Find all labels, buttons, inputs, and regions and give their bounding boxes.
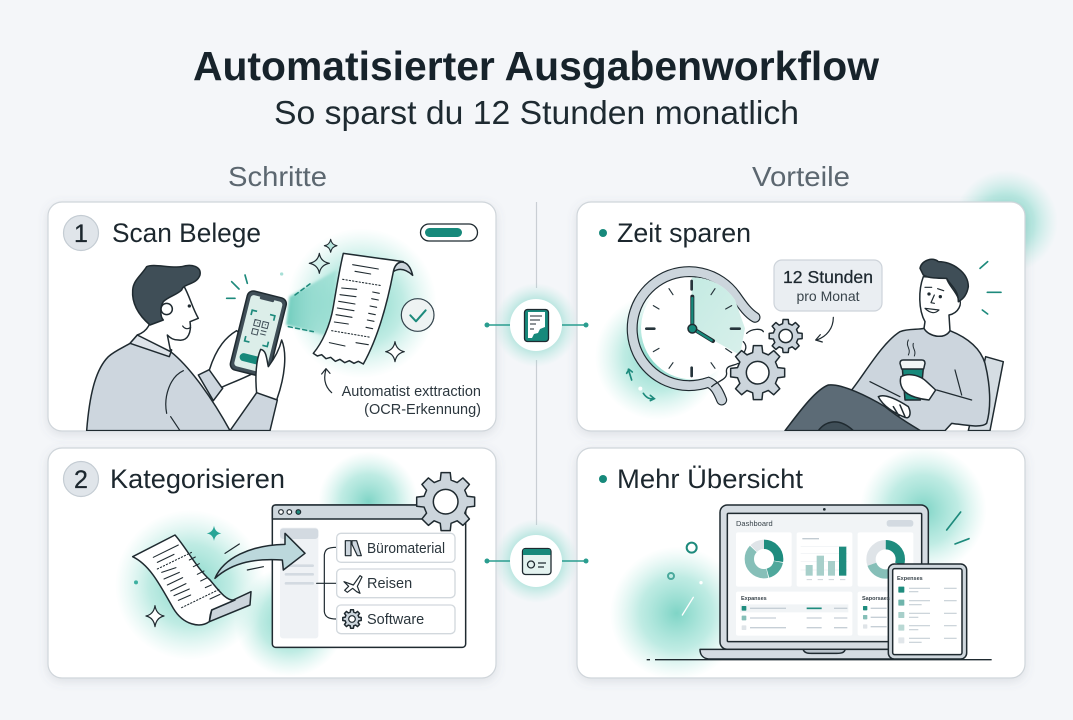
- illustration: receipt moved into categories window: [115, 452, 475, 677]
- category label: Büromaterial: Büromaterial: [367, 541, 445, 557]
- panel: step 1 scan receipts: [48, 202, 496, 431]
- illustration: laptop and tablet dashboards: [610, 447, 992, 680]
- illustration: melting clock, gears and relaxed person: [595, 259, 1003, 431]
- callout: 12 hours per month: [774, 260, 882, 311]
- step number 1: 1: [74, 220, 88, 248]
- icon: browser window: [522, 548, 551, 574]
- center divider lines: [536, 202, 538, 525]
- bullet: [599, 229, 607, 237]
- caption: OCR extraction: [342, 384, 481, 418]
- label: Expenses: Expenses: [897, 576, 923, 582]
- step number 2: 2: [74, 466, 88, 494]
- callout: 12 hours per month: 12 Stunden: [783, 267, 873, 287]
- label: Dashboard: Dashboard: [736, 519, 773, 528]
- panel: step 2 categorise: [48, 448, 496, 678]
- caption: OCR extraction: Automatist exttraction: [342, 384, 481, 400]
- subtitle: So sparst du 12 Stunden monatlich: [274, 94, 799, 131]
- step number 1: [64, 216, 98, 250]
- connector node: receipt: [484, 283, 588, 367]
- icon: receipt document: [524, 310, 548, 342]
- callout: 12 hours per month: pro Monat: [796, 288, 860, 304]
- category label: Software: Software: [367, 612, 424, 628]
- glow behind benefit card: [954, 170, 1058, 274]
- connector node: dashboard card: [484, 519, 588, 603]
- column heading: Schritte: Schritte: [228, 161, 327, 192]
- heading: Mehr Übersicht: Mehr Übersicht: [617, 464, 803, 494]
- label: Expanses: Expanses: [741, 596, 767, 602]
- heading: Scan Belege: Scan Belege: [112, 218, 261, 248]
- illustration: person scanning a receipt: [87, 228, 437, 431]
- label: Saporsaes: Saporsaes: [862, 596, 890, 602]
- caption: OCR extraction: (OCR-Erkennung): [364, 402, 481, 418]
- title: Automatisierter Ausgabenworkflow: [193, 43, 879, 89]
- toggle pill: [420, 224, 478, 241]
- step number 2: [64, 462, 98, 496]
- category label: Reisen: Reisen: [367, 576, 412, 592]
- bullet: [599, 475, 607, 483]
- heading: Kategorisieren: Kategorisieren: [110, 464, 285, 494]
- column heading: Vorteile: Vorteile: [752, 161, 850, 192]
- panel: benefit more overview: [577, 447, 1025, 680]
- panel: benefit save time: [577, 202, 1025, 431]
- heading: Zeit sparen: Zeit sparen: [617, 218, 751, 248]
